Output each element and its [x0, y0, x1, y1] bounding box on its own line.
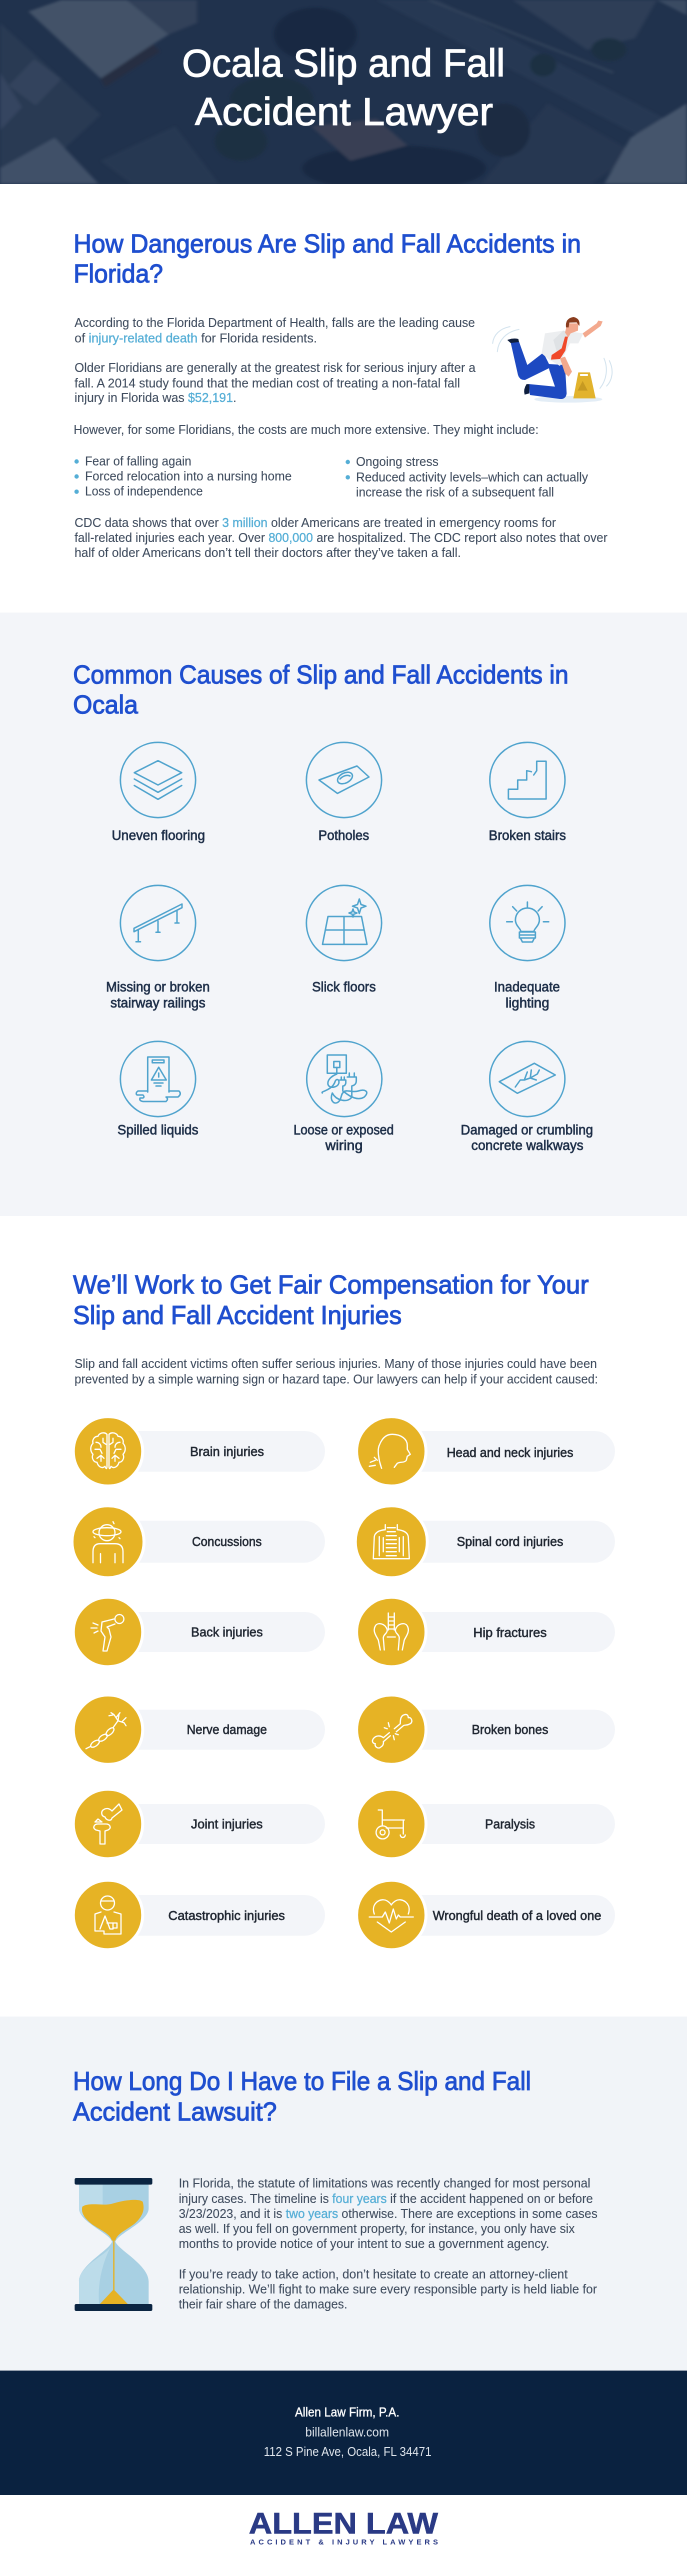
heading: How Dangerous Are Slip and Fall Accidents in — [74, 229, 581, 259]
CDC text: half of older Americans don’t tell their doctors after they’ve taken a fall. — [74, 545, 461, 560]
statute of limitations text: In Florida, the statute of limitations was recently changed for most personal — [179, 2176, 590, 2191]
heading: How Long Do I Have to File a Slip and Fall — [73, 2066, 531, 2096]
CDC text — [74, 515, 608, 560]
label: wiring — [324, 1138, 363, 1153]
statute of limitations text: relationship. We’ll fight to make sure every responsible party is held liable for — [179, 2282, 598, 2297]
label: Head and neck injuries — [447, 1445, 574, 1460]
label: Catastrophic injuries — [168, 1908, 285, 1923]
label: Spinal cord injuries — [457, 1534, 564, 1549]
icon: stacked floor layers — [120, 742, 196, 818]
label: Wrongful death of a loved one — [433, 1908, 601, 1923]
list: costs, left column: Fear of falling again — [85, 453, 191, 468]
icon: person with arm sling — [95, 1896, 121, 1934]
heading: Ocala — [73, 690, 139, 720]
icon: neuron — [86, 1713, 126, 1749]
icon: joint bones — [94, 1804, 122, 1844]
statute of limitations text: If you’re ready to take action, don’t hesitate to create an attorney-client — [179, 2266, 568, 2281]
heading: Accident Lawsuit? — [73, 2096, 277, 2126]
cause: inadequate lighting — [490, 885, 565, 1011]
injury: joint — [73, 1789, 325, 1859]
panel: common causes — [0, 613, 687, 1216]
title: Accident Lawyer — [195, 91, 493, 134]
title — [182, 42, 505, 134]
label: Back injuries — [191, 1625, 263, 1640]
icon: stair railing — [120, 885, 196, 961]
label: Concussions — [192, 1534, 262, 1549]
CDC text: CDC data shows that over 3 million older Americans are treated in emergency rooms for — [74, 515, 557, 530]
intro text — [74, 315, 539, 437]
heading — [73, 2066, 531, 2126]
icon: brain — [91, 1433, 125, 1469]
footer contact band: 112 S Pine Ave, Ocala, FL 34471 — [264, 2444, 432, 2459]
label: Nerve damage — [187, 1722, 267, 1737]
intro text: According to the Florida Department of Health, falls are the leading cause — [74, 315, 475, 330]
label: Paralysis — [485, 1817, 535, 1832]
list: costs, left column: Forced relocation into a nursing home — [85, 468, 292, 483]
intro text: of injury-related death for Florida residents. — [74, 330, 317, 346]
icon: shining floor tiles — [306, 885, 382, 961]
intro text — [74, 1356, 598, 1387]
injury: brain — [73, 1417, 325, 1486]
label: Potholes — [318, 828, 369, 843]
intro text: fall. A 2014 study found that the median cost of treating a non-fatal fall — [74, 375, 460, 390]
cause: broken stairs — [489, 742, 566, 843]
title: Ocala Slip and Fall — [182, 42, 505, 86]
injury: spinal cord — [355, 1506, 615, 1578]
CDC text: fall-related injuries each year. Over 800,000 are hospitalized. The CDC report also notes that over — [74, 530, 608, 545]
injury: nerve damage — [73, 1695, 325, 1764]
icon: heart with pulse line — [369, 1900, 413, 1932]
icon: tangled wires and outlet — [307, 1041, 382, 1117]
injury: catastrophic — [73, 1880, 325, 1950]
list: costs, right column — [346, 454, 588, 499]
footer contact band: Allen Law Firm, P.A. — [295, 2405, 400, 2420]
heading — [73, 1270, 589, 1330]
statute of limitations text: their fair share of the damages. — [179, 2297, 347, 2312]
label: Broken stairs — [489, 828, 566, 843]
label: Slick floors — [312, 980, 376, 994]
icon: wet floor sign with puddle — [120, 1041, 196, 1117]
heading: Florida? — [74, 258, 163, 288]
logo: Allen Law: ACCIDENT & INJURY LAWYERS — [250, 2537, 438, 2546]
illustration: man slipping beside wet floor sign — [493, 317, 612, 403]
injury: paralysis — [357, 1789, 615, 1859]
injury: back — [73, 1597, 325, 1667]
label: Loose or exposed — [294, 1123, 394, 1138]
heading: Common Causes of Slip and Fall Accidents in — [73, 659, 568, 689]
label: Uneven flooring — [112, 828, 205, 843]
list: costs, left column — [74, 453, 292, 499]
injury: hip fractures — [357, 1597, 615, 1667]
statute of limitations text: as well. If you fell on government property, for instance, you only have six — [179, 2221, 575, 2236]
label: Brain injuries — [190, 1444, 264, 1459]
footer contact band — [0, 2371, 687, 2495]
cause: slick floors — [306, 885, 382, 994]
icon: broken staircase — [490, 742, 565, 818]
statute of limitations text: injury cases. The timeline is four years if the accident happened on or before — [179, 2191, 593, 2206]
cause: potholes — [306, 742, 382, 843]
list: costs, right column: increase the risk of a subsequent fall — [356, 484, 554, 499]
label: stairway railings — [110, 996, 206, 1011]
injury: wrongful death — [357, 1880, 615, 1950]
icon: cracked slab — [490, 1041, 565, 1117]
list: costs, left column: Loss of independence — [85, 484, 203, 499]
icon: spine and torso — [373, 1525, 409, 1559]
icon: person holding back — [91, 1614, 124, 1651]
label: Missing or broken — [106, 980, 210, 994]
label: Spilled liquids — [117, 1123, 199, 1138]
icon: wheelchair — [376, 1810, 405, 1839]
label — [494, 980, 560, 1011]
statute of limitations text: 3/23/2023, and it is two years otherwise. There are exceptions in some cases — [179, 2206, 598, 2221]
panel: how dangerous — [74, 229, 612, 560]
intro text: injury in Florida was $52,191. — [74, 390, 236, 405]
aerial city photo backdrop — [0, 0, 687, 191]
intro text: Slip and fall accident victims often suffer serious injuries. Many of those injuries could have been — [74, 1356, 597, 1371]
intro text: Older Floridians are generally at the greatest risk for serious injury after a — [74, 360, 476, 375]
label: concrete walkways — [471, 1138, 584, 1153]
label: Inadequate — [494, 980, 560, 994]
icon: fractured bone — [372, 1714, 412, 1748]
list: costs, right column: Ongoing stress — [356, 454, 439, 469]
intro text: prevented by a simple warning sign or hazard tape. Our lawyers can help if your accident caused: — [74, 1372, 598, 1387]
heading: Slip and Fall Accident Injuries — [73, 1300, 402, 1330]
label — [461, 1123, 593, 1153]
label: Damaged or crumbling — [461, 1123, 593, 1138]
heading — [73, 659, 568, 720]
heading: We’ll Work to Get Fair Compensation for Your — [73, 1270, 589, 1300]
cause: spilled liquids — [117, 1041, 199, 1138]
icon: pelvis — [374, 1613, 408, 1650]
statute of limitations text: months to provide notice of your intent to sue a government agency. — [179, 2236, 549, 2251]
panel: filing deadline — [0, 2017, 687, 2371]
label — [294, 1123, 394, 1153]
header banner — [0, 0, 687, 191]
label: lighting — [506, 996, 549, 1011]
icon: head with orbiting stars — [93, 1522, 123, 1563]
icon: hourglass — [75, 2178, 152, 2311]
label — [106, 980, 210, 1011]
icon: light bulb — [490, 885, 565, 961]
heading — [74, 229, 581, 288]
cause: loose or exposed wiring — [294, 1041, 394, 1153]
label: Hip fractures — [473, 1625, 547, 1640]
logo: Allen Law: ALLEN LAW — [249, 2507, 439, 2540]
panel: compensation — [72, 1270, 615, 1950]
footer contact band: billallenlaw.com — [305, 2424, 389, 2440]
icon: head profile — [369, 1434, 410, 1468]
list: costs, right column: Reduced activity levels–which can actually — [356, 469, 588, 484]
injury: head and neck — [357, 1417, 615, 1486]
label: Broken bones — [472, 1722, 549, 1737]
injury: concussions — [72, 1506, 325, 1578]
intro text: However, for some Floridians, the costs are much more extensive. They might include: — [74, 422, 539, 437]
injury: broken bones — [357, 1695, 615, 1764]
cause: damaged concrete walkways — [461, 1041, 593, 1153]
label: Joint injuries — [191, 1817, 263, 1832]
statute of limitations text — [179, 2176, 598, 2312]
cause: missing or broken railings — [106, 885, 210, 1011]
cause: uneven flooring — [112, 742, 205, 843]
icon: pothole — [306, 742, 382, 818]
